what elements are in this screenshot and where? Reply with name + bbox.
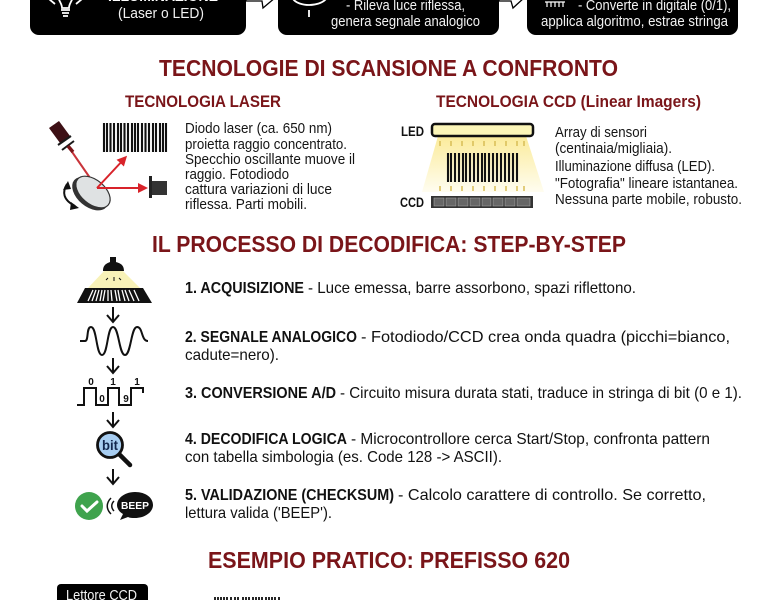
icon: lamp over barcode xyxy=(77,257,152,303)
step 4 text xyxy=(185,431,710,466)
arrow: step 2 to 3 xyxy=(499,0,525,8)
CCD description: Illuminazione diffusa (LED). xyxy=(555,158,715,175)
step 3 text: - Circuito misura durata stati, traduce in stringa di bit (0 e 1). xyxy=(340,385,742,402)
step 4 text: con tabella simbologia (es. Code 128 -> ASCII). xyxy=(185,449,502,466)
step 5 text: - Calcolo carattere di controllo. Se corretto, xyxy=(398,487,706,504)
step 4 text: 4. DECODIFICA LOGICA xyxy=(185,431,347,448)
barcode: example xyxy=(215,597,279,600)
icon: laser scanner diagram xyxy=(49,121,167,217)
step 2 text: - Fotodiodo/CCD crea onda quadra (picchi=bianco, xyxy=(361,329,730,346)
icon: magnifier with bit: bit xyxy=(102,437,118,453)
icon: valid check and beep xyxy=(75,492,153,520)
arrow: conversion to logic xyxy=(107,412,119,427)
step 4 text: - Microcontrollore cerca Start/Stop, confronta pattern xyxy=(351,431,710,448)
icon: CCD diagram: CCD xyxy=(400,194,424,210)
decoder description xyxy=(541,0,731,30)
icon: square wave with bits: 0 xyxy=(99,394,105,405)
step 1 text: - Luce emessa, barre assorbono, spazi riflettono. xyxy=(308,280,636,297)
laser description: Specchio oscillante muove il xyxy=(185,151,355,168)
laser description: cattura variazioni di luce xyxy=(185,181,332,198)
laser heading: TECNOLOGIA LASER xyxy=(125,92,281,111)
icon: CCD diagram xyxy=(400,123,544,210)
flow step: decoder xyxy=(527,0,738,35)
arrow: logic to validation xyxy=(107,469,119,484)
heading: technologies compared: TECNOLOGIE DI SCANSIONE A CONFRONTO xyxy=(159,55,618,81)
icon: light bulb xyxy=(49,0,82,16)
CCD description: Array di sensori xyxy=(555,124,647,141)
icon: chip xyxy=(545,2,565,7)
step 2 text: 2. SEGNALE ANALOGICO xyxy=(185,329,357,346)
laser description: raggio. Fotodiodo xyxy=(185,166,289,183)
laser description: proietta raggio concentrato. xyxy=(185,136,347,153)
barcode xyxy=(104,123,166,152)
heading: decoding process: IL PROCESSO DI DECODIFICA: STEP-BY-STEP xyxy=(152,231,626,257)
CCD heading: TECNOLOGIA CCD (Linear Imagers) xyxy=(436,92,701,111)
illumination label: (Laser o LED) xyxy=(118,5,204,22)
icon: square wave with bits: 1 xyxy=(110,377,116,388)
step 5 text: 5. VALIDAZIONE (CHECKSUM) xyxy=(185,487,394,504)
icon: sensor eye xyxy=(293,0,326,17)
icon: valid check and beep: BEEP xyxy=(121,500,149,512)
label: CCD reader xyxy=(57,584,148,600)
icon: square wave with bits: 0 xyxy=(88,377,94,388)
illumination label xyxy=(108,0,218,22)
panel: CCD technology xyxy=(400,92,742,210)
step 5 text xyxy=(185,487,706,522)
arrow: acquisition to signal xyxy=(107,307,119,322)
arrow: signal to conversion xyxy=(107,358,119,373)
icon: CCD diagram: LED xyxy=(401,123,424,139)
sensor description xyxy=(331,0,480,30)
icon: square wave with bits: 9 xyxy=(123,394,129,405)
icon: magnifier with bit xyxy=(98,432,130,465)
panel: laser technology xyxy=(49,92,355,217)
CCD description: "Fotografia" lineare istantanea. xyxy=(555,175,738,192)
icon: square wave with bits xyxy=(77,377,143,405)
step 3 text: 3. CONVERSIONE A/D xyxy=(185,385,336,402)
CCD description: Nessuna parte mobile, robusto. xyxy=(555,191,742,208)
flow step: illumination xyxy=(30,0,246,35)
step 3 text xyxy=(185,385,742,402)
laser description: riflessa. Parti mobili. xyxy=(185,196,307,213)
step 1 text xyxy=(185,280,636,297)
step 1 text: 1. ACQUISIZIONE xyxy=(185,280,304,297)
heading: practical example: ESEMPIO PRATICO: PREFISSO 620 xyxy=(208,547,570,573)
laser description: Diodo laser (ca. 650 nm) xyxy=(185,120,332,137)
icon: square wave with bits: 1 xyxy=(134,377,140,388)
step 2 text xyxy=(185,329,730,364)
CCD description: (centinaia/migliaia). xyxy=(555,140,672,157)
CCD description xyxy=(555,124,742,208)
step 2 text: cadute=nero). xyxy=(185,347,279,364)
icon: analog wave xyxy=(80,327,148,355)
decoder description: applica algoritmo, estrae stringa xyxy=(541,13,729,30)
flow step: photodiode sensor xyxy=(278,0,499,35)
arrow: step 1 to 2 xyxy=(246,0,276,8)
sensor description: genera segnale analogico xyxy=(331,13,480,30)
laser description xyxy=(185,120,355,213)
step 5 text: lettura valida ('BEEP'). xyxy=(185,505,332,522)
